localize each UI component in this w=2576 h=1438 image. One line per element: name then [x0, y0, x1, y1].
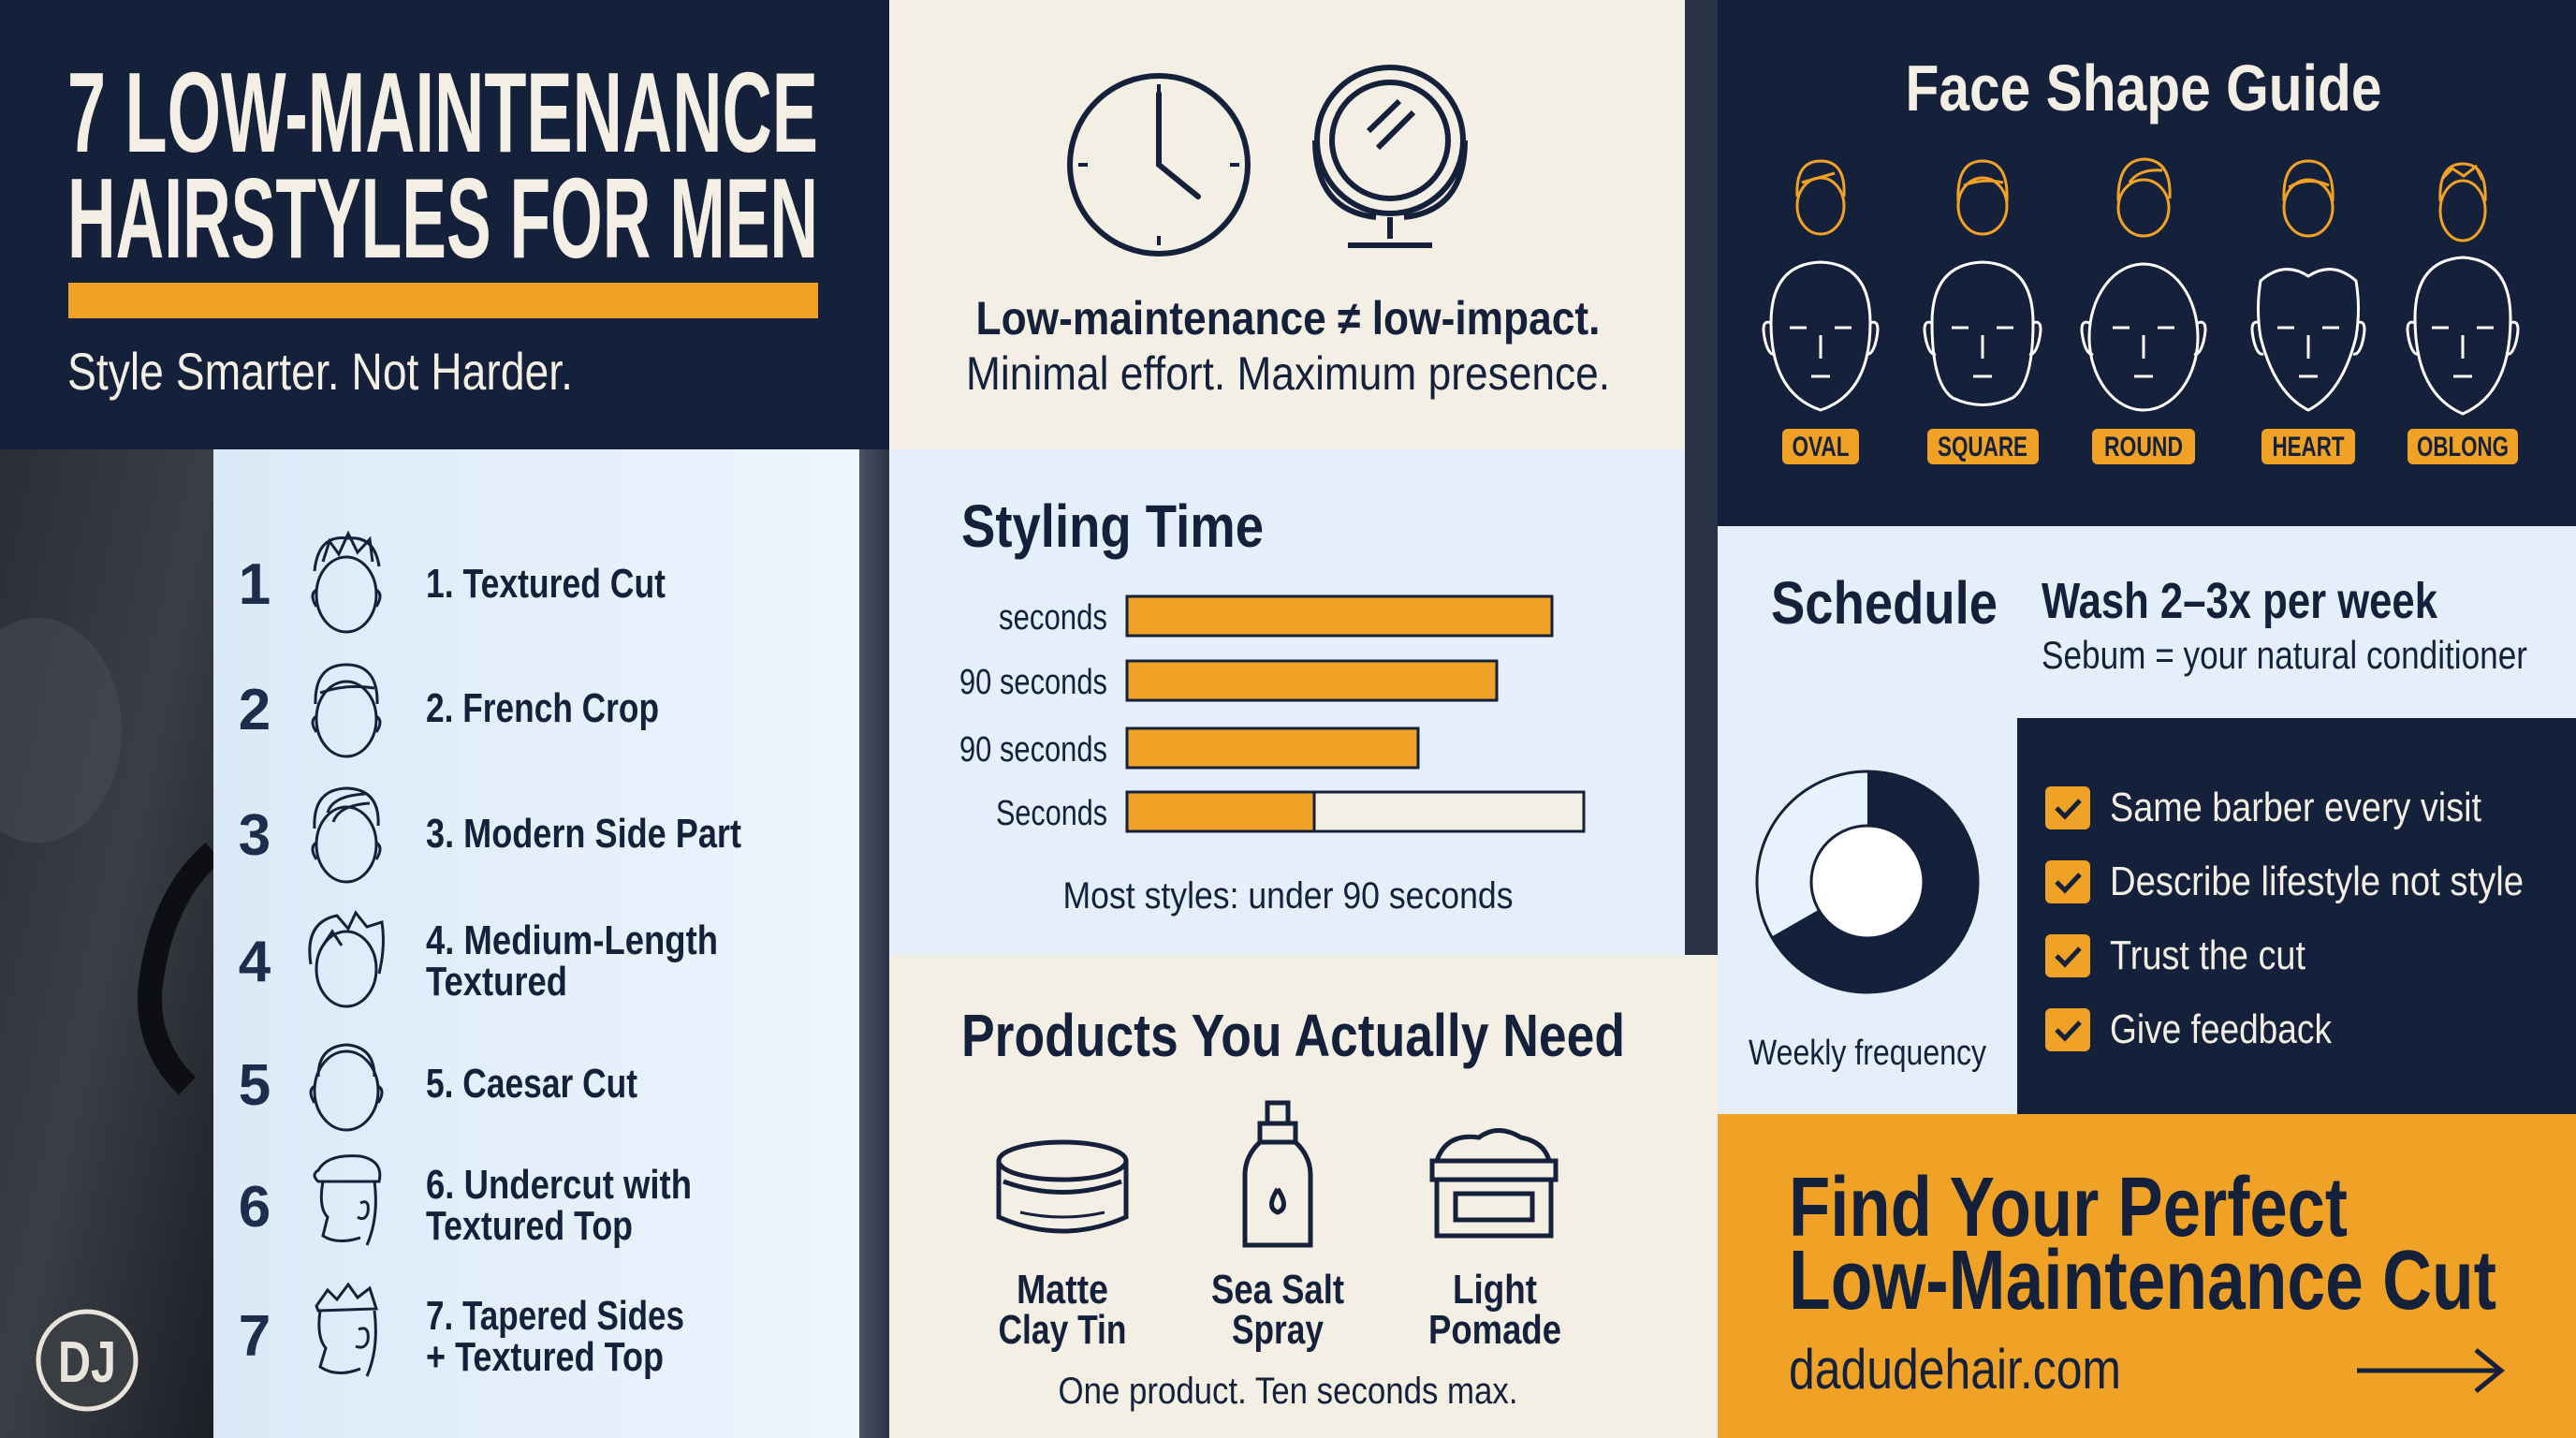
list item 3: 3. Modern Side Part — [426, 811, 741, 857]
title: HAIRSTYLES FOR MEN — [67, 154, 818, 282]
bar chart: seconds — [999, 598, 1107, 638]
list item 6 — [239, 1156, 692, 1249]
product labels: Pomade — [1428, 1307, 1561, 1353]
donut caption: Weekly frequency — [1749, 1034, 1986, 1073]
title — [67, 49, 818, 282]
icon: mirror — [1315, 67, 1465, 245]
list item 7: + Textured Top — [426, 1334, 664, 1380]
list item 4 — [239, 913, 718, 1006]
panel: styling time bar chart — [889, 449, 1685, 955]
icon: pomade jar — [1432, 1131, 1556, 1236]
panel: tagline with icons — [889, 0, 1718, 955]
checklist items: Same barber every visit — [2110, 785, 2481, 830]
arrow — [2357, 1350, 2501, 1391]
list item 2 — [239, 665, 659, 756]
panel: call to action — [1718, 1114, 2576, 1438]
CTA heading — [1789, 1161, 2496, 1328]
schedule heading: Schedule — [1771, 569, 1998, 637]
panel: schedule — [1718, 526, 2576, 718]
list item 7 — [239, 1284, 684, 1380]
checklist items: Describe lifestyle not style — [2110, 858, 2524, 904]
bar chart: 90 seconds — [959, 663, 1107, 702]
product labels: Clay Tin — [998, 1307, 1127, 1353]
list item 5: 5. Caesar Cut — [426, 1061, 637, 1107]
bar chart — [959, 596, 1584, 833]
logo: DJ — [58, 1330, 116, 1395]
list item 1: 1 — [239, 552, 271, 617]
bar chart: 90 seconds — [959, 730, 1107, 770]
list item 4: Textured — [426, 959, 567, 1005]
CTA heading: Find Your Perfect — [1789, 1161, 2348, 1255]
list item 4: 4. Medium-Length — [426, 917, 718, 963]
checklist items: Give feedback — [2110, 1006, 2333, 1052]
donut chart — [1757, 771, 1978, 992]
panel: products — [889, 955, 1718, 1438]
list item 4: 4 — [239, 930, 271, 994]
list item 3 — [239, 788, 741, 882]
list item 6: 6 — [239, 1175, 271, 1240]
heading: Styling Time — [961, 492, 1264, 560]
list item 5: 5 — [239, 1053, 271, 1118]
face shapes row: ROUND — [2104, 432, 2183, 462]
icon: spray bottle — [1245, 1103, 1310, 1245]
bar chart: Seconds — [996, 794, 1107, 833]
title: 7 LOW-MAINTENANCE — [67, 49, 818, 176]
face shapes row: HEART — [2273, 432, 2344, 462]
panel: hairstyles list — [213, 449, 889, 1438]
list item 6: Textured Top — [426, 1203, 633, 1249]
panel: weekly frequency donut — [1718, 718, 2017, 1114]
product labels — [998, 1267, 1561, 1353]
list item 5 — [239, 1045, 637, 1130]
face shapes row: OBLONG — [2417, 432, 2509, 462]
face shapes row: OVAL — [1792, 432, 1850, 462]
orange underline bar — [68, 283, 818, 318]
website url: dadudehair.com — [1789, 1338, 2121, 1401]
schedule text — [2042, 573, 2527, 677]
list item 1 — [239, 534, 666, 632]
list item 6: 6. Undercut with — [426, 1162, 692, 1208]
products caption: One product. Ten seconds max. — [1058, 1371, 1518, 1412]
caption: Most styles: under 90 seconds — [1063, 875, 1513, 917]
panel: barber checklist — [2017, 718, 2576, 1114]
heading: Products You Actually Need — [961, 1002, 1625, 1069]
list item 1: 1. Textured Cut — [426, 561, 666, 607]
face shapes row — [1764, 159, 2518, 464]
icon: clay tin — [999, 1142, 1126, 1231]
list item 3: 3 — [239, 803, 271, 868]
checklist items: Trust the cut — [2110, 932, 2305, 978]
panel: face shape guide — [1718, 0, 2576, 526]
list item 2: 2. French Crop — [426, 685, 659, 731]
logo — [38, 1312, 136, 1409]
list item 7: 7 — [239, 1304, 271, 1369]
face shapes row: SQUARE — [1938, 432, 2027, 462]
heading: Face Shape Guide — [1906, 51, 2381, 125]
subtitle: Style Smarter. Not Harder. — [67, 342, 573, 401]
product labels: Sea Salt — [1211, 1267, 1344, 1313]
panel: title header — [0, 0, 889, 449]
tagline text — [966, 292, 1610, 400]
checklist items — [2045, 785, 2524, 1052]
product labels: Light — [1453, 1267, 1537, 1313]
tagline text: Minimal effort. Maximum presence. — [966, 347, 1610, 400]
product labels: Spray — [1232, 1307, 1324, 1353]
tagline text: Low-maintenance ≠ low-impact. — [975, 292, 1601, 345]
product labels: Matte — [1017, 1267, 1108, 1313]
list item 7: 7. Tapered Sides — [426, 1293, 684, 1339]
icon: clock — [1070, 76, 1248, 254]
panel: photo background — [0, 449, 213, 1438]
list item 2: 2 — [239, 678, 271, 742]
schedule text: Wash 2–3x per week — [2042, 573, 2438, 629]
